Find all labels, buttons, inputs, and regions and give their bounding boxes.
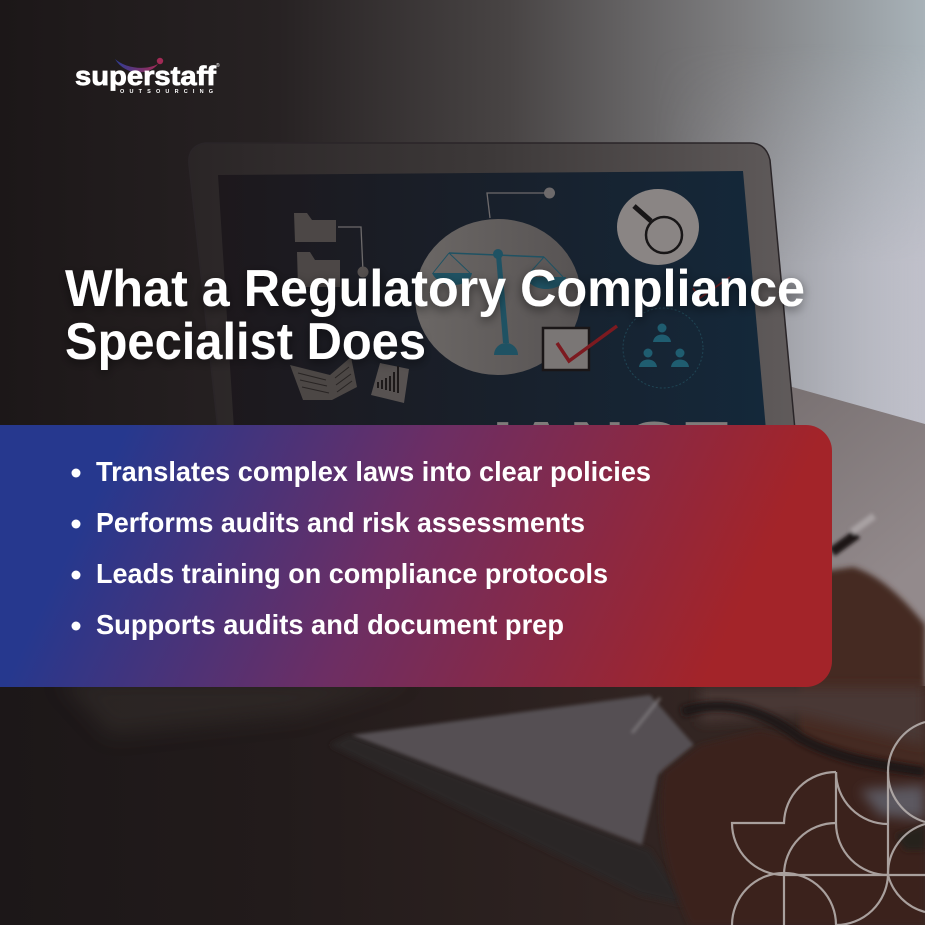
blurred hand: [661, 567, 925, 925]
notebook pen tip: [632, 698, 660, 733]
list item 4: Supports audits and document prep: [96, 609, 564, 640]
small check behind title: [693, 277, 730, 298]
scale icon: [432, 249, 566, 355]
chart document icon: [371, 363, 409, 403]
title: Specialist Does: [65, 313, 426, 371]
logo tagline: OUTSOURCING: [120, 89, 213, 95]
screen wordmark fragment: IANCE: [492, 410, 732, 479]
blurred pen on desk: [832, 516, 874, 552]
scale disc: [415, 219, 581, 375]
title: [65, 260, 805, 371]
laptop screen: [218, 171, 766, 430]
blurred notebook: [330, 695, 694, 905]
laptop bezel: [189, 143, 795, 430]
decorative geometric line art: [732, 722, 925, 925]
panel background: [0, 425, 832, 687]
panel: responsibilities: [0, 425, 832, 687]
logo swoosh: [115, 59, 158, 72]
desk surface: [792, 387, 925, 686]
laptop: [188, 142, 796, 425]
lower dark surface: [278, 686, 925, 925]
folder icons: [294, 213, 340, 287]
wall highlight: [724, 107, 925, 424]
title: What a Regulatory Compliance: [65, 260, 805, 318]
list item 2: Performs audits and risk assessments: [96, 507, 585, 538]
logo wordmark: superstaff: [75, 61, 217, 91]
book icon: [290, 357, 357, 400]
people icon: [623, 308, 703, 388]
laptop base glow: [80, 687, 327, 730]
list item 3: Leads training on compliance protocols: [96, 558, 608, 589]
logo registered mark: ®: [216, 62, 220, 69]
connector line: [338, 193, 549, 272]
list item 1: Translates complex laws into clear policies: [96, 456, 651, 487]
logo: superstaff outsourcing: [75, 58, 220, 95]
checkbox icon: [543, 326, 617, 370]
magnifier icon: [617, 189, 699, 265]
